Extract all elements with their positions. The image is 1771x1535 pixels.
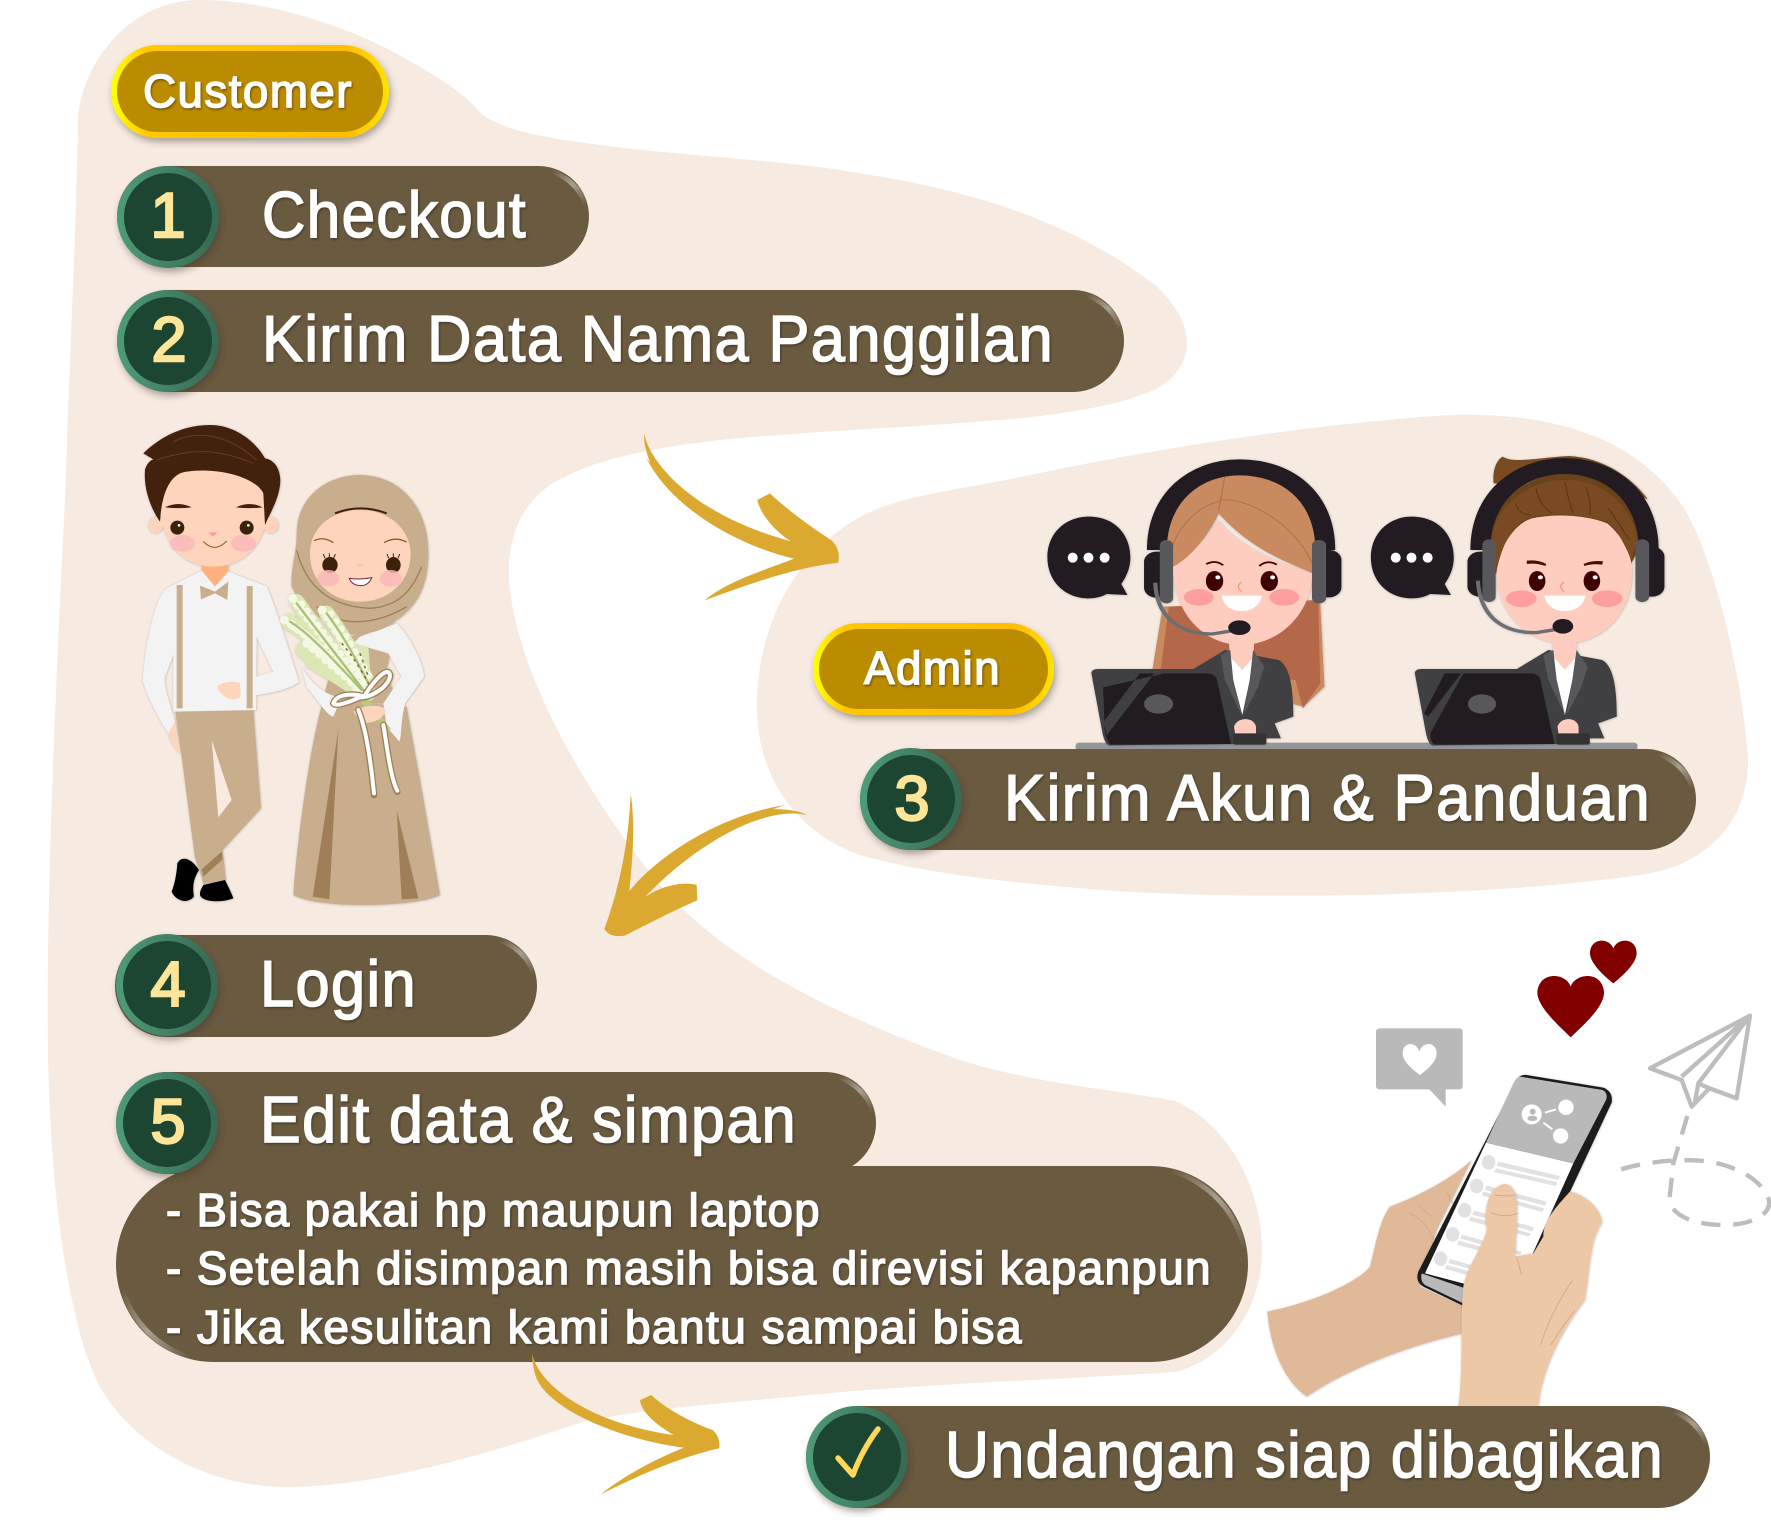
icon: check mark	[838, 1429, 878, 1475]
background blob: customer area	[48, 0, 1262, 1487]
step 5: Edit data & simpan with notes	[116, 1072, 1248, 1362]
arrow: customer to admin	[644, 434, 839, 600]
icon: paper plane with dashed trail	[1617, 1016, 1769, 1225]
arrow: edit to finished	[532, 1354, 719, 1494]
background blob: admin area	[757, 415, 1748, 896]
step 4: Login: 4	[150, 950, 186, 1020]
desk	[1076, 743, 1637, 751]
step 1: Checkout: Checkout	[262, 178, 527, 251]
step 5: Edit data & simpan with notes: 5	[150, 1087, 186, 1157]
bride	[284, 475, 440, 905]
step 5: Edit data & simpan with notes: Edit data & simpan	[260, 1083, 797, 1156]
icon: small heart	[1590, 941, 1637, 983]
step 2: Kirim Data Nama Panggilan	[117, 290, 1124, 392]
bouquet	[284, 598, 392, 730]
right hand	[1458, 1184, 1602, 1407]
icon: large heart	[1537, 976, 1604, 1037]
badge: Customer	[114, 48, 386, 135]
left hand	[1267, 1160, 1472, 1397]
phone	[1417, 1075, 1612, 1320]
arrow: admin to login	[604, 794, 807, 936]
laptop	[1091, 669, 1266, 745]
operator: woman	[1047, 467, 1341, 745]
step 4: Login	[115, 935, 537, 1037]
badge: Admin	[816, 626, 1051, 712]
notes panel: - Jika kesulitan kami bantu sampai bisa	[166, 1301, 1023, 1353]
speech bubble	[1047, 517, 1130, 598]
step 4: Login: Login	[260, 947, 417, 1020]
groom	[143, 425, 299, 901]
step 2: Kirim Data Nama Panggilan: 2	[151, 305, 187, 375]
step 2: Kirim Data Nama Panggilan: Kirim Data Nama Panggilan	[262, 302, 1054, 375]
illustration: hands with phone and hearts	[1267, 941, 1769, 1407]
step 6: Undangan siap dibagikan	[806, 1406, 1710, 1508]
notes panel: - Setelah disimpan masih bisa direvisi kapanpun	[166, 1242, 1212, 1294]
badge: Admin: Admin	[864, 642, 1001, 694]
operator: man	[1371, 456, 1664, 745]
step 3: Kirim Akun & Panduan: 3	[894, 764, 930, 834]
notes panel: - Bisa pakai hp maupun laptop	[166, 1184, 821, 1236]
notes panel	[116, 1166, 1248, 1362]
step 1: Checkout: 1	[150, 181, 186, 251]
laptop	[1415, 669, 1590, 745]
step 3: Kirim Akun & Panduan: Kirim Akun & Panduan	[1004, 761, 1651, 834]
step 1: Checkout	[117, 166, 589, 267]
icon: speech bubble with heart	[1376, 1028, 1463, 1107]
badge: Customer: Customer	[143, 65, 353, 117]
step 6: Undangan siap dibagikan: Undangan siap dibagikan	[945, 1418, 1664, 1491]
illustration: admin operators	[1047, 456, 1664, 751]
illustration: bride and groom	[143, 425, 440, 905]
step 3: Kirim Akun & Panduan	[860, 749, 1696, 850]
speech bubble	[1371, 517, 1454, 598]
